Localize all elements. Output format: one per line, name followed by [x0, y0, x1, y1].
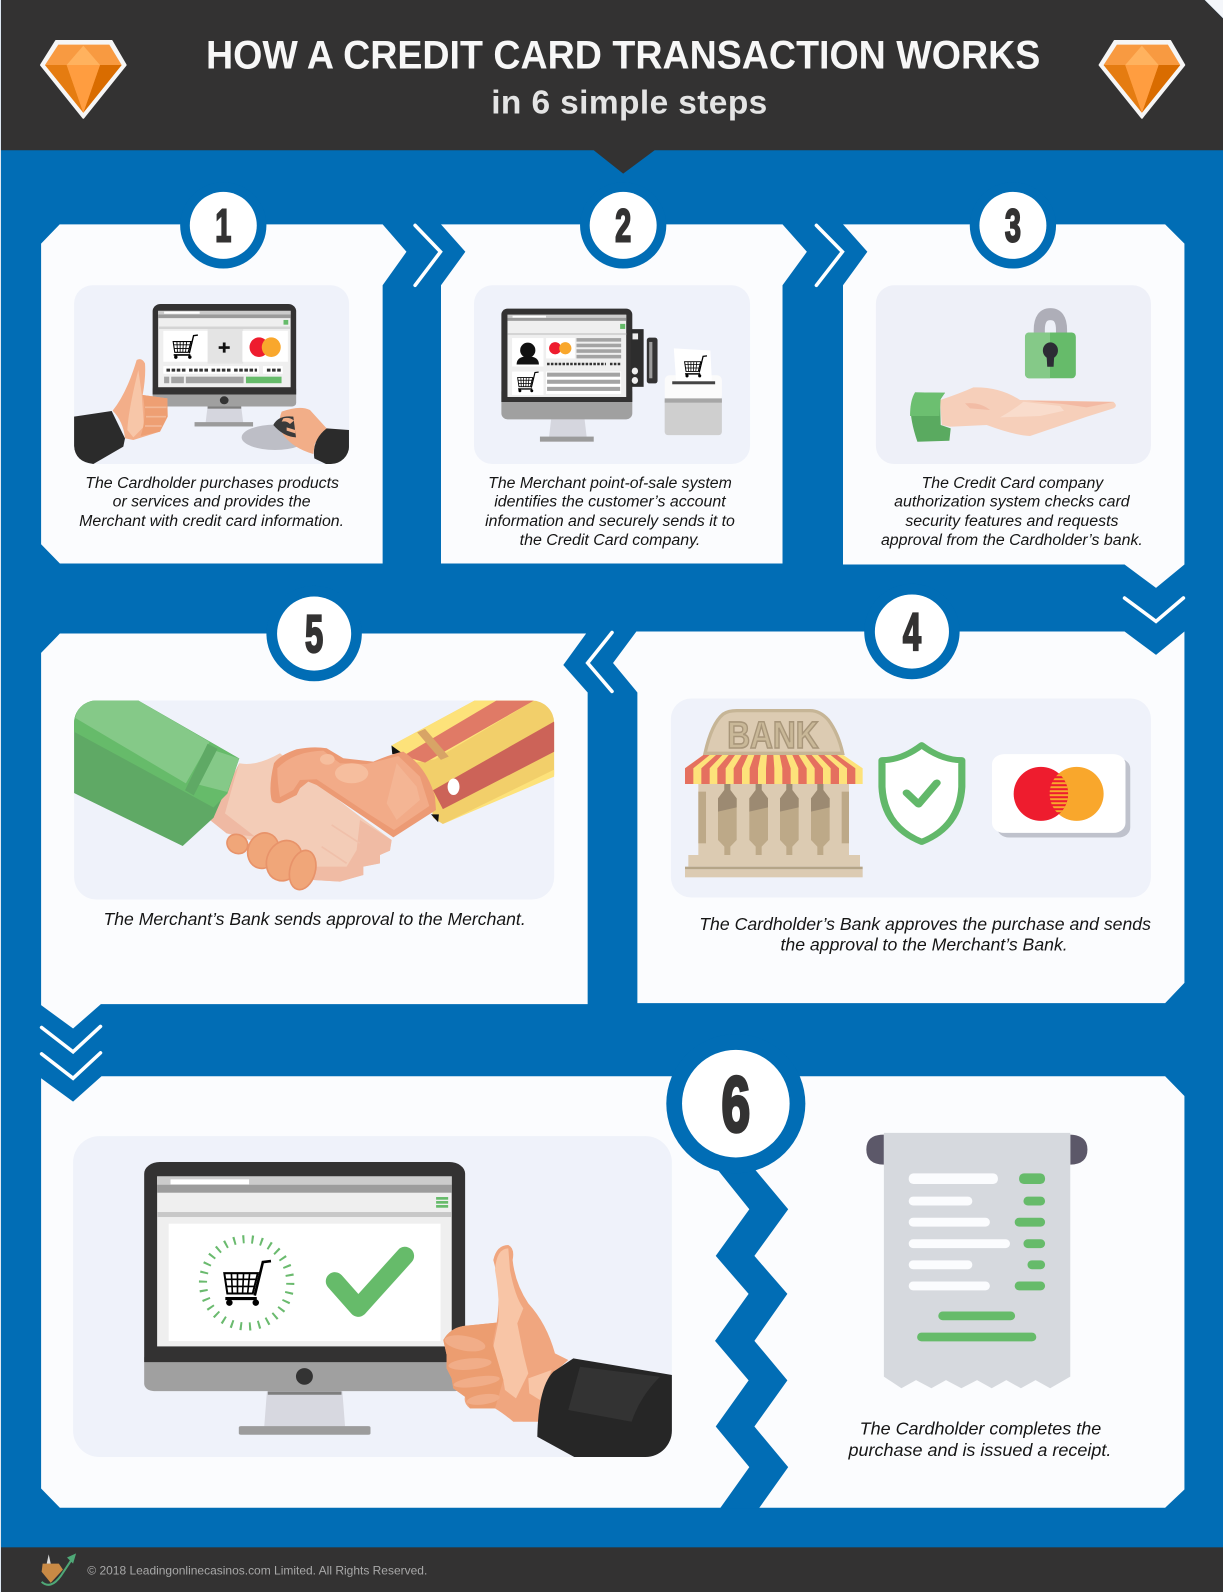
text: step 2 description: information and securely sends it to	[485, 512, 735, 530]
text: step 1 description: The Cardholder purchases products	[85, 474, 339, 492]
illustration: handshake	[74, 701, 554, 900]
text: step 6 description: purchase and is issued a receipt.	[847, 1440, 1111, 1460]
text: step 3 description: authorization system checks card	[894, 493, 1131, 511]
text: step 4 description: The Cardholder’s Bank approves the purchase and sends	[699, 914, 1151, 934]
panel: step 3	[843, 224, 1184, 588]
text: step 3 description: security features and requests	[905, 512, 1118, 530]
panel: step 2	[441, 224, 807, 563]
bank sign: BANK	[727, 714, 819, 756]
text: step 2 description	[485, 474, 735, 549]
panel: step 4	[613, 632, 1184, 1003]
arrow: step 4 to 5	[588, 633, 612, 691]
number badge 1: 1	[215, 201, 231, 252]
panel: step 1	[41, 224, 406, 563]
text: step 3 description: The Credit Card company	[922, 474, 1104, 492]
number badge 3	[970, 182, 1056, 269]
number badge 4: 4	[903, 603, 921, 662]
icon: footer logo	[42, 1553, 76, 1585]
text: step 2 description: the Credit Card company.	[520, 531, 700, 549]
text: step 1 description: Merchant with credit card information.	[79, 512, 344, 530]
arrow: step 1 to 2	[415, 225, 440, 285]
text: step 5 description: The Merchant’s Bank sends approval to the Merchant.	[104, 909, 526, 929]
arrow: step 2 to 3	[816, 225, 842, 285]
panel: step 5	[41, 634, 588, 1029]
illustration: padlock over open hand	[876, 285, 1151, 464]
text: step 2 description: The Merchant point-of-sale system	[488, 474, 732, 492]
number badge 2	[580, 182, 666, 269]
number badge 6: 6	[721, 1061, 750, 1149]
number badge 3: 3	[1005, 201, 1021, 252]
illustration: point-of-sale terminal	[474, 285, 750, 464]
header band	[1, 0, 1223, 174]
arrow: step 3 to 4	[1125, 598, 1183, 621]
number badge 2: 2	[615, 201, 631, 252]
footer band	[1, 1547, 1223, 1592]
text: step 4 description	[699, 914, 1151, 954]
text: step 4 description: the approval to the Merchant’s Bank.	[780, 934, 1068, 954]
text: step 3 description: approval from the Cardholder’s bank.	[881, 531, 1143, 549]
text: step 1 description: or services and provides the	[113, 493, 311, 511]
arrow: step 5 to 6	[42, 1026, 100, 1078]
number badge 6	[666, 1034, 805, 1173]
panel: step 6	[41, 1076, 1184, 1508]
subtitle: in 6 simple steps	[491, 85, 767, 122]
number badge 4	[864, 584, 960, 679]
icon: right gem	[1100, 41, 1184, 118]
illustration: computer with thumbs up and mouse	[74, 285, 349, 464]
zigzag divider	[715, 1170, 788, 1508]
text: step 6 description: The Cardholder completes the	[860, 1419, 1101, 1439]
illustration: bank, shield and card	[671, 699, 1151, 898]
icon: left gem	[41, 41, 126, 118]
illustration: receipt	[866, 1133, 1087, 1388]
number badge 5	[266, 586, 362, 681]
number badge 5: 5	[305, 605, 323, 664]
number badge 1	[180, 182, 266, 269]
illustration: order confirmed on monitor	[73, 1136, 672, 1457]
text: step 2 description: identifies the customer’s account	[494, 493, 726, 511]
title: HOW A CREDIT CARD TRANSACTION WORKS	[206, 34, 1040, 78]
text: step 3 description	[881, 474, 1143, 549]
text: step 6 description	[847, 1419, 1111, 1460]
text: step 1 description	[79, 474, 344, 530]
footer copyright: © 2018 Leadingonlinecasinos.com Limited. All Rights Reserved.	[87, 1564, 427, 1578]
